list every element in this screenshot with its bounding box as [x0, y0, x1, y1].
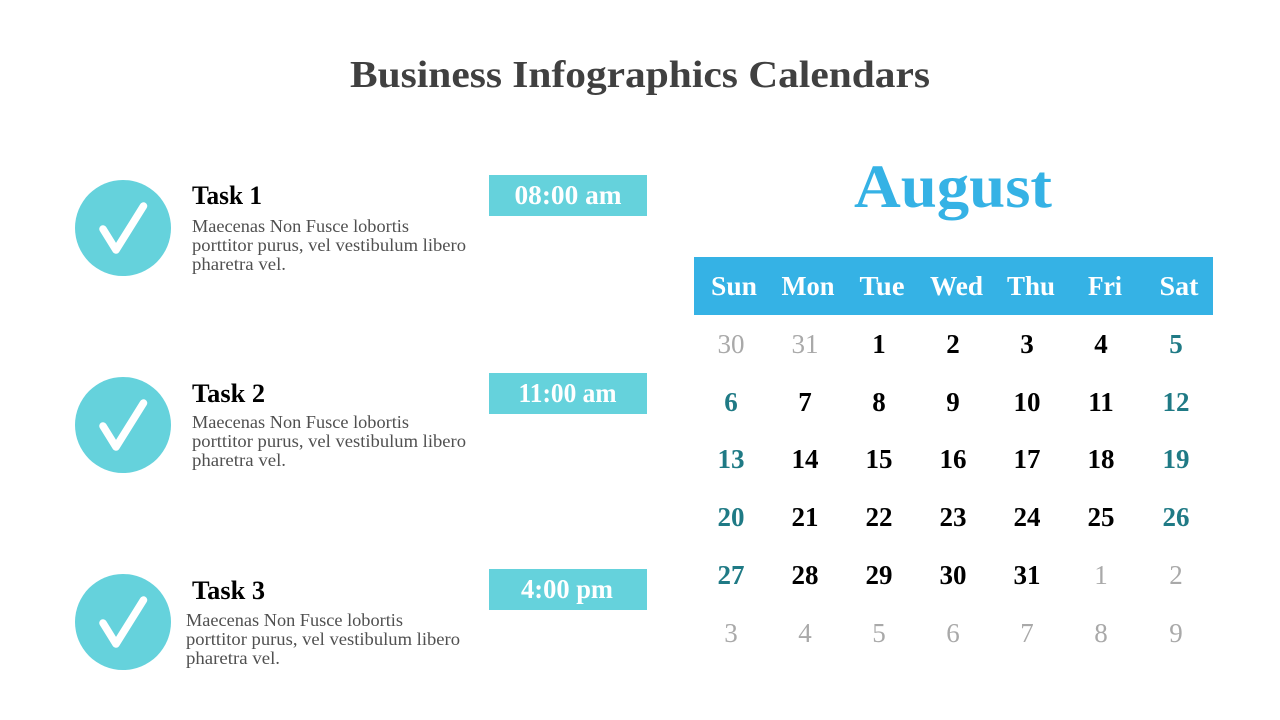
date grid: 9 — [1169, 618, 1183, 648]
date grid: 9 — [946, 387, 960, 417]
date grid: 15 — [866, 444, 892, 474]
panel: task 1 — [75, 175, 647, 276]
icon: check circle 2 — [75, 377, 171, 473]
date grid: 5 — [1169, 329, 1183, 359]
date grid: 20 — [718, 502, 744, 532]
date grid: 7 — [1020, 618, 1034, 648]
text block: task 1 description: pharetra vel. — [192, 254, 286, 274]
date grid: 24 — [1014, 502, 1040, 532]
date grid: 21 — [792, 502, 818, 532]
text block: task 1 description: porttitor purus, vel vestibulum libero — [192, 235, 466, 255]
icon: check circle 3 — [75, 574, 171, 670]
time badge: 08:00 am — [489, 175, 647, 216]
date grid: 7 — [798, 387, 812, 417]
date grid: 4 — [798, 618, 812, 648]
time badge: 08:00 am: 08:00 am — [514, 180, 622, 210]
date grid: 14 — [792, 444, 818, 474]
weekday header: Mon — [782, 271, 834, 301]
text block: task 2 description: pharetra vel. — [192, 450, 286, 470]
heading: task 2: Task 2 — [192, 379, 265, 408]
text block: task 1 description — [192, 216, 466, 274]
date grid: 4 — [1094, 329, 1108, 359]
date grid: 19 — [1162, 444, 1190, 474]
date grid: 11 — [1088, 387, 1114, 417]
weekday header: Fri — [1088, 271, 1122, 301]
date grid: 29 — [866, 560, 892, 590]
date grid: 3 — [1020, 329, 1034, 359]
date grid: 3 — [724, 618, 738, 648]
date grid: 6 — [946, 618, 960, 648]
text block: task 3 description: Maecenas Non Fusce lobortis — [186, 610, 403, 630]
date grid: 12 — [1162, 387, 1190, 417]
date grid: 5 — [872, 618, 886, 648]
panel: task 3 — [75, 569, 647, 670]
date grid: 2 — [1169, 560, 1183, 590]
date grid: 31 — [792, 329, 818, 359]
time badge: 4:00 pm — [489, 569, 647, 610]
text block: task 1 description: Maecenas Non Fusce lobortis — [192, 216, 409, 236]
date grid: 1 — [1094, 560, 1108, 590]
weekday header — [694, 257, 1213, 315]
text block: task 2 description — [192, 412, 466, 470]
date grid: 25 — [1088, 502, 1114, 532]
month heading: August — [854, 154, 1053, 221]
text block: task 2 description: Maecenas Non Fusce lobortis — [192, 412, 409, 432]
time badge: 4:00 pm: 4:00 pm — [521, 574, 613, 604]
date grid: 18 — [1088, 444, 1114, 474]
date grid: 6 — [724, 387, 738, 417]
weekday header: Sat — [1160, 271, 1199, 301]
date grid: 30 — [940, 560, 966, 590]
weekday header: Sun — [711, 271, 757, 301]
date grid — [718, 329, 1190, 648]
weekday header: Thu — [1007, 271, 1055, 301]
weekday header: Tue — [860, 271, 905, 301]
weekday header: Wed — [930, 271, 983, 301]
title: Business Infographics Calendars — [350, 54, 930, 96]
time badge: 11:00 am — [489, 373, 647, 414]
time badge: 11:00 am: 11:00 am — [518, 378, 617, 408]
date grid: 27 — [718, 560, 744, 590]
heading: task 1: Task 1 — [192, 181, 262, 210]
date grid: 23 — [940, 502, 966, 532]
date grid: 26 — [1162, 502, 1190, 532]
text block: task 2 description: porttitor purus, vel vestibulum libero — [192, 431, 466, 451]
date grid: 2 — [946, 329, 960, 359]
icon: check circle 1 — [75, 180, 171, 276]
date grid: 28 — [792, 560, 818, 590]
text block: task 3 description: pharetra vel. — [186, 648, 280, 668]
date grid: 13 — [718, 444, 744, 474]
date grid: 17 — [1014, 444, 1040, 474]
date grid: 8 — [872, 387, 886, 417]
panel: calendar — [694, 154, 1213, 648]
text block: task 3 description: porttitor purus, vel vestibulum libero — [186, 629, 460, 649]
date grid: 1 — [872, 329, 886, 359]
panel: task 2 — [75, 373, 647, 473]
date grid: 10 — [1014, 387, 1040, 417]
heading: task 3: Task 3 — [192, 576, 265, 605]
date grid: 22 — [866, 502, 892, 532]
date grid: 16 — [940, 444, 966, 474]
date grid: 8 — [1094, 618, 1108, 648]
date grid: 30 — [718, 329, 744, 359]
text block: task 3 description — [186, 610, 460, 668]
date grid: 31 — [1014, 560, 1040, 590]
